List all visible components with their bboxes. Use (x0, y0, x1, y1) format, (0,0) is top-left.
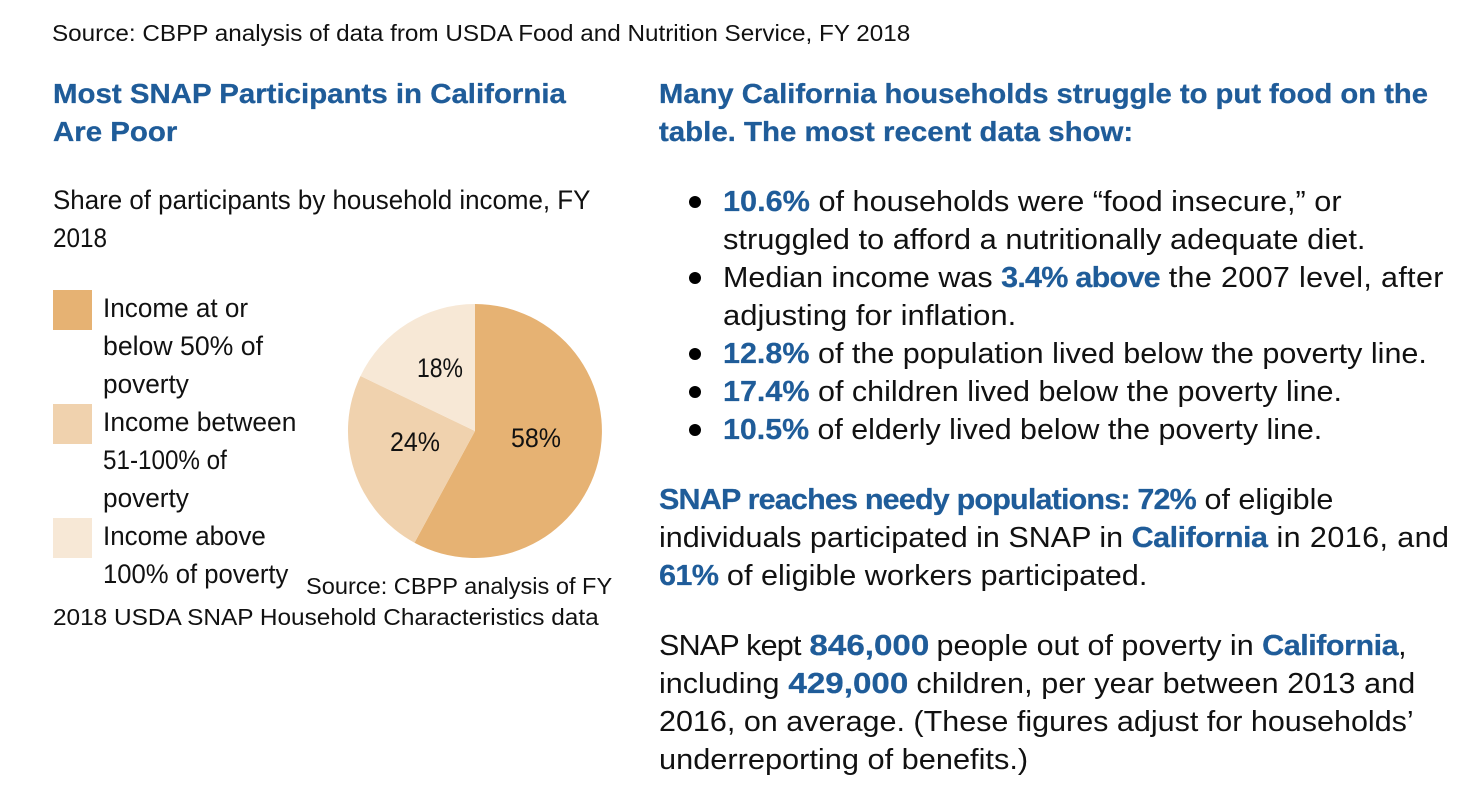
chart source: Source: CBPP analysis of FY (306, 573, 612, 599)
chart subtitle: 2018 (53, 223, 107, 253)
legend label: 51-100%: 51-100% of (103, 445, 227, 475)
bullet list (689, 186, 1444, 446)
chart subtitle (53, 185, 590, 253)
label 24%: 24% (390, 427, 440, 457)
legend label: at or below 50%: poverty (103, 369, 189, 399)
legend label: above 100%: 100% of poverty (103, 559, 288, 589)
paragraph: SNAP kept people out of poverty: including children, per year between 2013 and (659, 668, 1415, 700)
legend label: 51-100%: poverty (103, 483, 189, 513)
left heading: Most SNAP Participants in California (53, 78, 566, 109)
paragraph: SNAP reaches needy populations: SNAP reaches needy populations: 72% of eligible (659, 484, 1333, 516)
right heading (659, 78, 1428, 147)
chart source: 2018 USDA SNAP Household Characteristics data (53, 604, 599, 630)
legend (53, 290, 296, 589)
paragraph: SNAP kept people out of poverty: 846,000 (809, 630, 929, 662)
bullet 2 text: adjusting for inflation. (723, 300, 1016, 332)
legend swatch: above 100% (53, 518, 92, 558)
slice 58% (414, 304, 602, 558)
chart source (53, 573, 612, 630)
paragraph: SNAP reaches needy populations (659, 484, 1449, 592)
legend label: at or below 50% (103, 293, 264, 399)
bullet 1 text (723, 186, 1365, 256)
paragraph: SNAP kept people out of poverty: SNAP kept people out of poverty in California, (659, 630, 1407, 662)
legend label: 51-100% (103, 407, 296, 513)
slice 18% (360, 304, 475, 431)
bullet 4 text: 17.4% of children lived below the poverty line. (723, 376, 1342, 408)
bullet 3 text: 12.8% of the population lived below the poverty line. (723, 338, 1427, 370)
bullet 1 text: 10.6% of households were “food insecure,” or (723, 186, 1342, 218)
left heading (53, 78, 566, 147)
bullet 2 text: Median income was 3.4% above the 2007 level, after (723, 262, 1444, 294)
legend swatch: at or below 50% (53, 290, 92, 330)
legend label: 51-100%: Income between (103, 407, 296, 437)
bullet 1 text: struggled to afford a nutritionally adequate diet. (723, 224, 1365, 256)
bullet 1 (689, 196, 701, 208)
right heading: Many California households struggle to put food on the (659, 78, 1428, 109)
legend label: above 100% (103, 521, 288, 589)
paragraph: SNAP kept people out of poverty: underreporting of benefits.) (659, 744, 1028, 776)
label 58%: 58% (511, 423, 561, 453)
legend label: at or below 50%: below 50% of (103, 331, 263, 361)
bullet 3 (689, 348, 701, 360)
paragraph: SNAP kept people out of poverty (659, 630, 1415, 776)
bullet 4 (689, 386, 701, 398)
chart subtitle: Share of participants by household income, FY (53, 185, 590, 215)
left heading: Are Poor (53, 116, 177, 147)
pie chart (348, 304, 602, 558)
bullet 2 (689, 272, 701, 284)
paragraph: SNAP kept people out of poverty: 429,000 (788, 668, 908, 700)
legend label: above 100%: Income above (103, 521, 266, 551)
bullet 5 (689, 424, 701, 436)
label 18%: 18% (417, 353, 463, 383)
slice 24% (348, 376, 475, 543)
paragraph: SNAP reaches needy populations: 61% of eligible workers participated. (659, 560, 1147, 592)
paragraph: SNAP kept people out of poverty: 2016, on average. (These figures adjust for households’ (659, 706, 1414, 738)
legend swatch: 51-100% (53, 404, 92, 444)
bullet 5 text: 10.5% of elderly lived below the poverty line. (723, 414, 1322, 446)
source line top: Source: CBPP analysis of data from USDA Food and Nutrition Service, FY 2018 (52, 20, 910, 46)
legend label: at or below 50%: Income at or (103, 293, 248, 323)
paragraph: SNAP reaches needy populations: individuals participated in SNAP in California in 2016, and (659, 522, 1449, 554)
right heading: table. The most recent data show: (659, 116, 1133, 147)
bullet 2 text (723, 262, 1444, 332)
